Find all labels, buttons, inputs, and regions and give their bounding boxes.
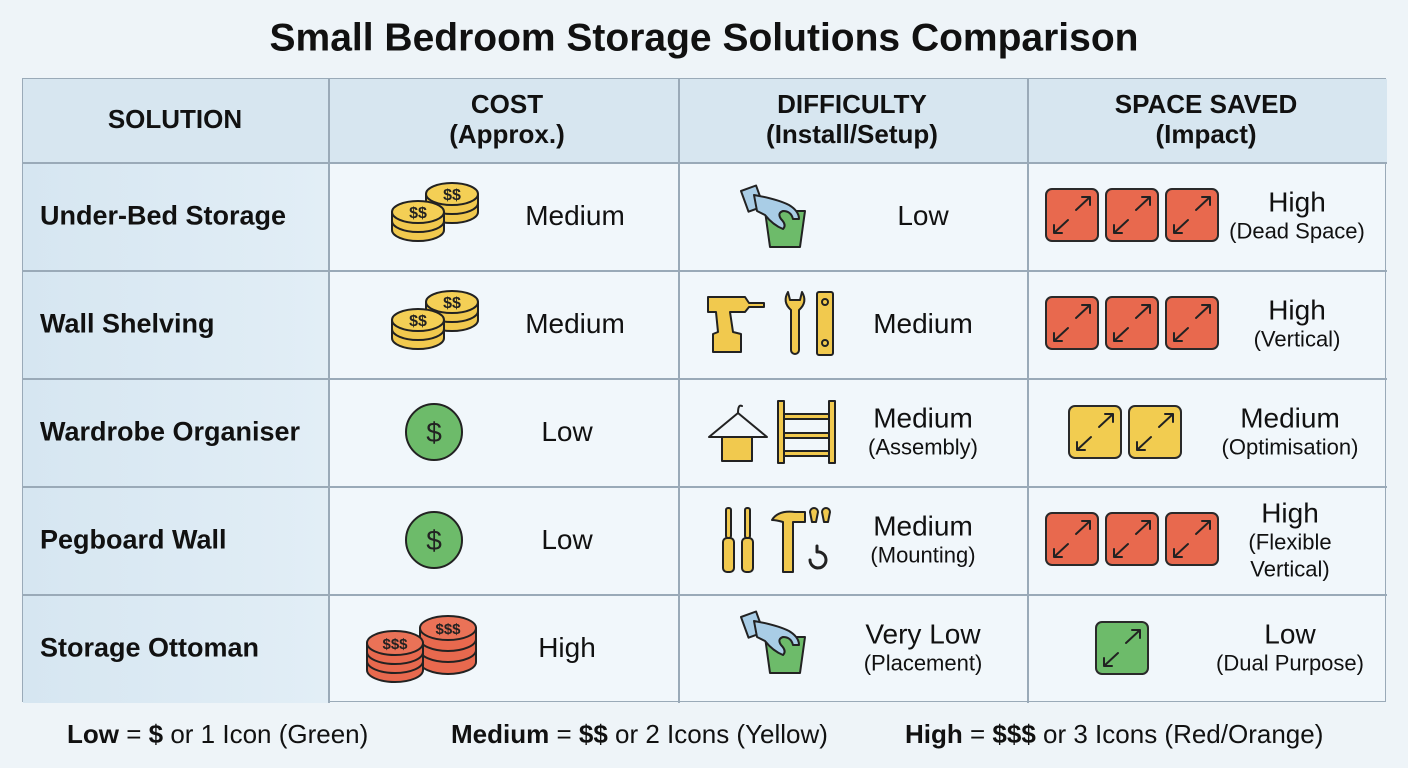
space text row1 [1229, 187, 1365, 244]
icon: red coins row5: $$$ [435, 621, 461, 638]
space text row4: High [1261, 498, 1319, 529]
space text row1: High [1268, 187, 1326, 218]
icon: hand bucket row5 [741, 612, 805, 673]
row name: ottoman: Storage Ottoman [40, 632, 259, 662]
space text row5 [1216, 619, 1364, 676]
space text row5: Low [1264, 619, 1316, 650]
space text row1: (Dead Space) [1229, 219, 1365, 244]
header: cost: COST [471, 89, 543, 119]
row name: wall shelving: Wall Shelving [40, 308, 215, 338]
difficulty text row2: Medium [873, 308, 973, 339]
difficulty text row3: Medium [873, 403, 973, 434]
icon: hand bucket row1 [741, 186, 805, 247]
space text row4: (Flexible [1248, 530, 1332, 555]
difficulty text row4: Medium [873, 511, 973, 542]
header: space saved: SPACE SAVED [1115, 89, 1297, 119]
header: difficulty [766, 89, 938, 149]
header: solution: SOLUTION [108, 104, 242, 134]
header: difficulty: DIFFICULTY [777, 89, 927, 119]
difficulty text row5 [864, 619, 982, 676]
icon: squares row4 [1046, 513, 1218, 565]
icon: dollar row3 [406, 404, 462, 460]
icon: red coins row5: $$$ [382, 636, 408, 653]
icon: tools row2 [708, 292, 833, 355]
icon: hanger and ladder row3 [709, 401, 835, 463]
header: space saved: (Impact) [1155, 119, 1257, 149]
legend: low: Low = $ or 1 Icon (Green) [67, 719, 368, 749]
row name: pegboard: Pegboard Wall [40, 524, 227, 554]
difficulty text row5: (Placement) [864, 651, 982, 676]
icon: coins row1 [392, 183, 478, 241]
space text row4 [1248, 498, 1332, 581]
cost text row1: Medium [525, 200, 625, 231]
icon: red coins row5 [367, 616, 476, 682]
row name: wardrobe: Wardrobe Organiser [40, 416, 300, 446]
header: cost [449, 89, 565, 149]
cost text row3: Low [541, 416, 593, 447]
icon: coins row2 [392, 291, 478, 349]
header: difficulty: (Install/Setup) [766, 119, 938, 149]
space text row2 [1254, 295, 1340, 352]
header: space saved [1115, 89, 1297, 149]
icon: squares row3 [1069, 406, 1181, 458]
space text row3 [1222, 403, 1358, 460]
space text row5: (Dual Purpose) [1216, 651, 1364, 676]
icon: squares row2 [1046, 297, 1218, 349]
cost text row5: High [538, 632, 596, 663]
space text row3: Medium [1240, 403, 1340, 434]
legend: medium: Medium = $$ or 2 Icons (Yellow) [451, 719, 828, 749]
title: Small Bedroom Storage Solutions Comparison [270, 17, 1138, 60]
legend: high: High = $$$ or 3 Icons (Red/Orange) [905, 719, 1323, 749]
difficulty text row3: (Assembly) [868, 435, 978, 460]
space text row3: (Optimisation) [1222, 435, 1358, 460]
row name: under-bed: Under-Bed Storage [40, 200, 286, 230]
icon: square row5 [1096, 622, 1148, 674]
difficulty text row4: (Mounting) [870, 543, 976, 568]
cost text row2: Medium [525, 308, 625, 339]
table [22, 78, 1386, 702]
difficulty text row5: Very Low [865, 619, 981, 650]
header: cost: (Approx.) [449, 119, 565, 149]
icon: dollar row4 [406, 512, 462, 568]
icon: squares row1 [1046, 189, 1218, 241]
legend [67, 719, 1323, 749]
difficulty text row4 [870, 511, 976, 568]
icon: tools row4 [723, 508, 830, 572]
cost text row4: Low [541, 524, 593, 555]
space text row4: Vertical) [1250, 556, 1330, 581]
difficulty text row3 [868, 403, 978, 460]
space text row2: (Vertical) [1254, 327, 1340, 352]
space text row2: High [1268, 295, 1326, 326]
difficulty text row1: Low [897, 200, 949, 231]
